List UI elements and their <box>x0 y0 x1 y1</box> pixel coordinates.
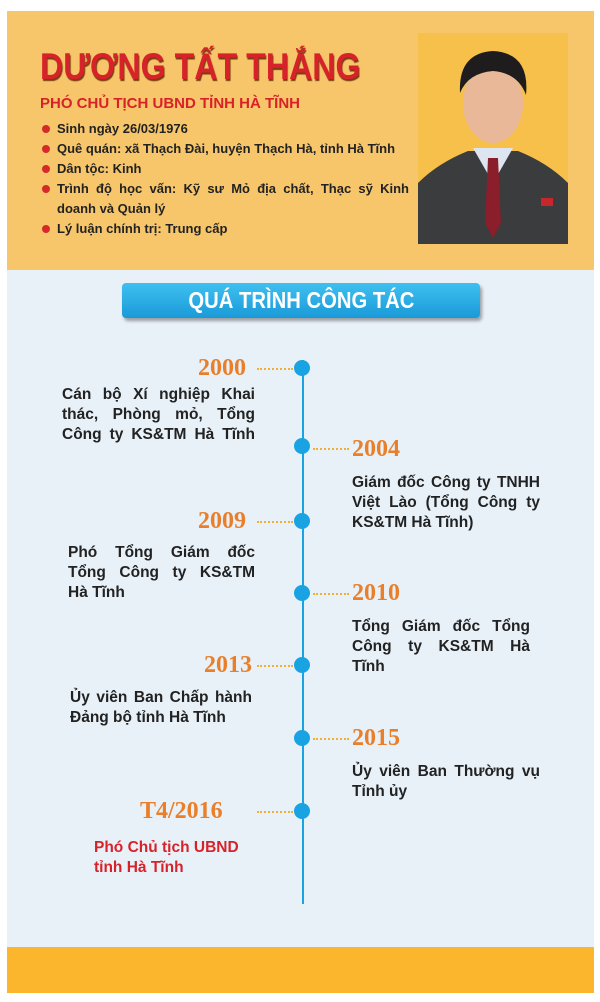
timeline: 2004 <box>294 436 540 531</box>
timeline: 2004: 2004 <box>352 436 400 462</box>
panel: timeline background <box>7 270 594 947</box>
timeline: 2009 <box>68 508 310 601</box>
timeline: 2009: Phó Tổng Giám đốc <box>68 544 255 561</box>
timeline: 2015: 2015 <box>352 725 400 751</box>
timeline: T4/2016 <box>94 798 310 876</box>
timeline: 2000 <box>62 355 310 443</box>
timeline: 2010: Tĩnh <box>352 658 385 675</box>
timeline: 2000: thác, Phòng mỏ, Tổng <box>62 406 255 423</box>
timeline: 2004: Việt Lào (Tổng Công ty <box>352 494 540 511</box>
timeline: 2004: KS&TM Hà Tĩnh) <box>352 514 473 531</box>
panel: profile header <box>7 11 594 270</box>
timeline: 2010: Công ty KS&TM Hà <box>352 638 530 655</box>
title: DƯƠNG TẤT THẮNG <box>40 46 361 87</box>
photo <box>418 33 568 244</box>
timeline: T4/2016: tỉnh Hà Tĩnh <box>94 859 184 876</box>
subtitle: PHÓ CHỦ TỊCH UBND TỈNH HÀ TĨNH <box>40 95 300 112</box>
timeline: 2000: Cán bộ Xí nghiệp Khai <box>62 386 255 403</box>
bullet list: Quê quán: xã Thạch Đài, huyện Thạch Hà, tỉnh Hà Tĩnh <box>57 141 395 156</box>
bullet list: Sinh ngày 26/03/1976 <box>57 121 188 136</box>
timeline: 2010: 2010 <box>352 580 400 606</box>
timeline: 2015: Ủy viên Ban Thường vụ <box>352 763 540 780</box>
timeline: 2015 <box>294 725 540 800</box>
timeline: 2009: Hà Tĩnh <box>68 584 125 601</box>
timeline: 2000: 2000 <box>198 355 246 381</box>
timeline: 2013: Đảng bộ tỉnh Hà Tĩnh <box>70 709 226 726</box>
bullet list: Dân tộc: Kinh <box>57 161 142 176</box>
timeline: 2010: Tổng Giám đốc Tổng <box>352 618 530 635</box>
timeline: 2009: 2009 <box>198 508 246 534</box>
timeline line <box>302 360 304 904</box>
timeline: 2000: Công ty KS&TM Hà Tĩnh <box>62 426 255 443</box>
footer bar <box>7 947 594 993</box>
timeline: T4/2016: Phó Chủ tịch UBND <box>94 839 239 856</box>
timeline: 2015: Tỉnh ủy <box>352 783 407 800</box>
timeline: 2010 <box>294 580 530 675</box>
timeline: T4/2016: T4/2016 <box>140 798 223 824</box>
timeline: 2013: 2013 <box>204 652 252 678</box>
bullet list: Trình độ học vấn: Kỹ sư Mỏ địa chất, Thạc sỹ Kinh doanh và Quản lý <box>57 181 409 216</box>
bullet list: Lý luận chính trị: Trung cấp <box>57 221 227 236</box>
timeline: 2009: Tổng Công ty KS&TM <box>68 564 255 581</box>
bullet list <box>42 121 409 236</box>
timeline: 2013: Ủy viên Ban Chấp hành <box>70 689 252 706</box>
timeline: 2013 <box>70 652 310 726</box>
timeline: 2004: Giám đốc Công ty TNHH <box>352 474 540 491</box>
heading: work history banner: QUÁ TRÌNH CÔNG TÁC <box>188 287 414 313</box>
heading: work history banner <box>122 283 480 318</box>
